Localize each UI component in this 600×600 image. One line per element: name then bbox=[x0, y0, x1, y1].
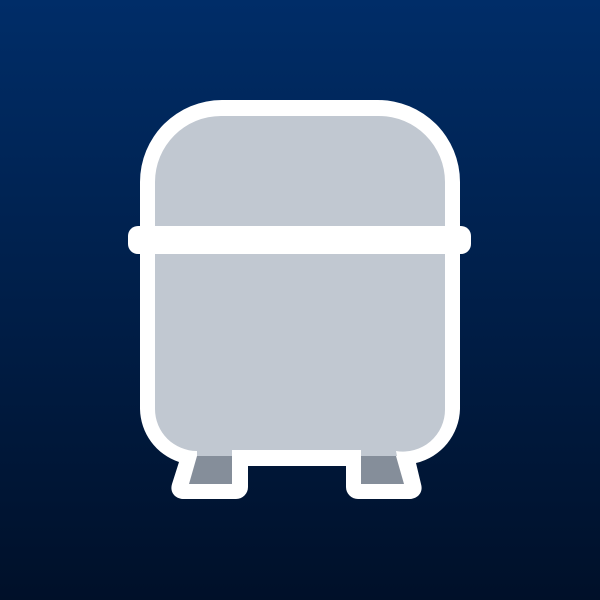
icon: tank bbox=[128, 100, 471, 499]
left foot shading bbox=[189, 456, 232, 484]
tank white outline bbox=[140, 100, 460, 499]
horizontal band bbox=[128, 226, 471, 254]
tank body fill bbox=[155, 116, 445, 456]
right foot shading bbox=[361, 456, 404, 484]
